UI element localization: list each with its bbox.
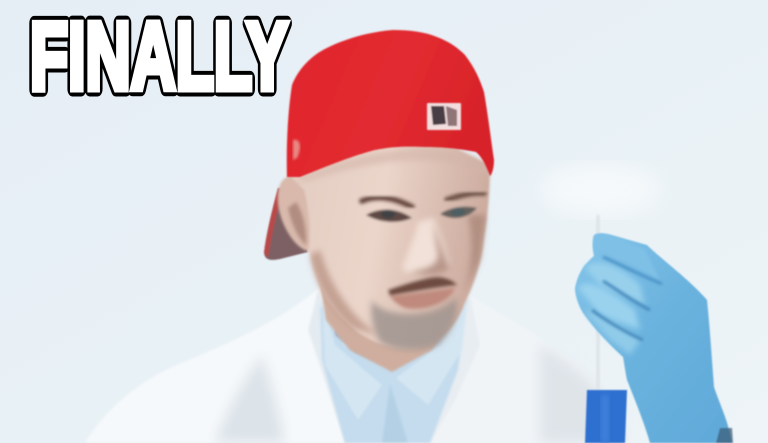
neck — [318, 255, 470, 372]
lab coat — [85, 285, 625, 443]
brows — [362, 197, 412, 207]
title: FINALLY — [30, 3, 288, 110]
icon: cap side logo — [293, 140, 300, 160]
test tube — [585, 215, 627, 443]
red cap — [287, 30, 494, 177]
fingers — [594, 235, 660, 280]
ear — [278, 176, 310, 251]
blue glove — [575, 233, 733, 443]
forehead shadow under cap — [300, 148, 490, 182]
nose — [402, 218, 449, 273]
eyes — [366, 210, 412, 222]
beard — [371, 298, 457, 350]
moustache — [388, 277, 457, 296]
finger creases — [603, 257, 662, 284]
icon: cap logo — [427, 103, 461, 130]
head — [278, 140, 490, 350]
title: FINALLY — [30, 3, 288, 110]
title — [30, 3, 288, 110]
blue shirt — [320, 296, 468, 443]
cheek shading — [310, 250, 378, 335]
cap brim behind ear — [264, 188, 308, 260]
lips — [390, 288, 455, 309]
